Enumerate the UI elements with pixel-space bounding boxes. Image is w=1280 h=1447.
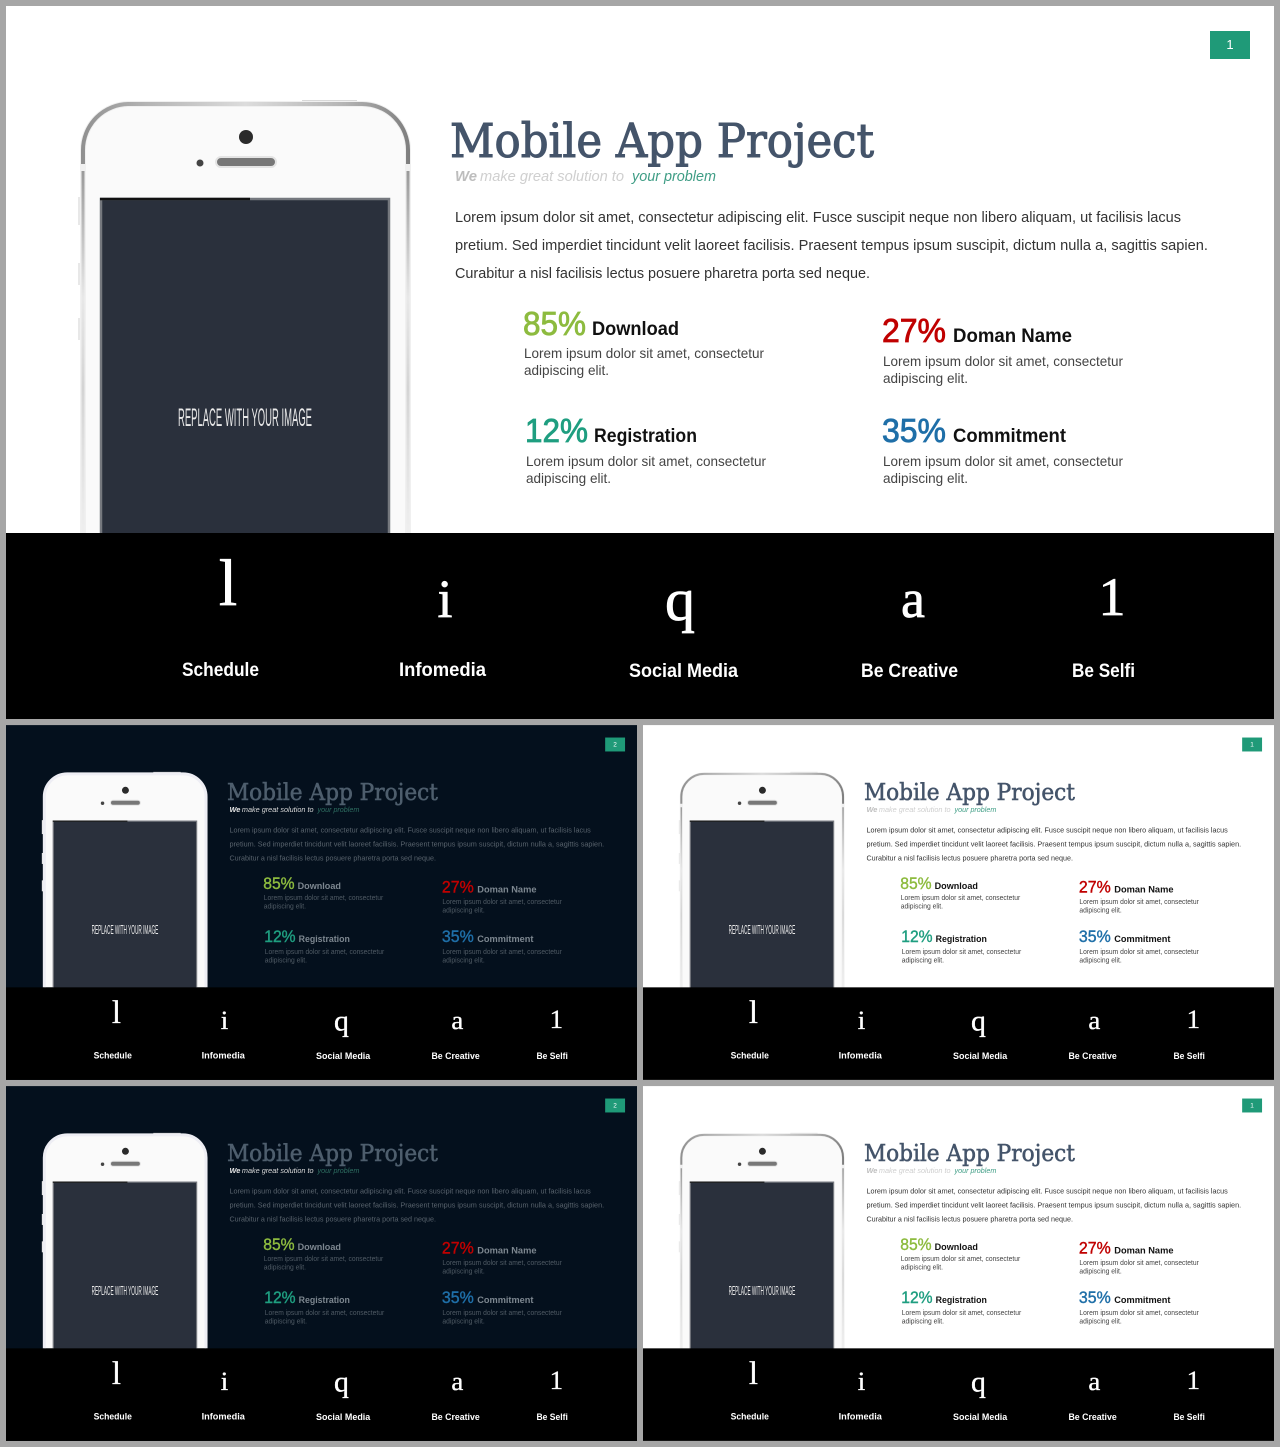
stat: registration: Lorem ipsum dolor sit amet, consectetur <box>902 949 1022 956</box>
bottom navigation band: l <box>749 995 758 1031</box>
bottom navigation band: i <box>858 1366 865 1396</box>
stat: download: 85% <box>263 1236 295 1254</box>
stat: registration: Registration <box>936 1295 987 1306</box>
phone mockup: REPLACE WITH YOUR IMAGE <box>92 1284 158 1298</box>
stat: commitment: 35% <box>882 412 946 449</box>
bottom navigation band: a <box>1088 1366 1100 1396</box>
stat: domain name: Doman Name <box>477 884 536 895</box>
page number badge: 1 <box>1226 37 1234 52</box>
title: Mobile App Project <box>450 114 874 169</box>
stat: download: Lorem ipsum dolor sit amet, consectetur <box>264 895 384 902</box>
stat: commitment: 35% <box>1079 928 1111 946</box>
intro paragraph: Lorem ipsum dolor sit amet, consectetur adipiscing elit. Fusce suscipit neque non libero aliquam, ut facilisis lacus <box>229 1187 591 1196</box>
stat: registration: Lorem ipsum dolor sit amet, consectetur <box>902 1310 1022 1317</box>
stat: domain name: Lorem ipsum dolor sit amet, consectetur <box>442 899 563 906</box>
bottom navigation band: Be Selfi <box>1173 1412 1205 1423</box>
stat: download: adipiscing elit. <box>264 904 306 911</box>
stat: commitment: Lorem ipsum dolor sit amet, consectetur <box>883 453 1123 469</box>
bottom navigation band: a <box>451 1366 463 1396</box>
subtitle <box>229 805 359 814</box>
bottom navigation band: Infomedia <box>839 1412 883 1423</box>
stat: commitment: adipiscing elit. <box>883 470 968 486</box>
stat: registration: Registration <box>299 934 350 945</box>
intro paragraph: Curabitur a nisl facilisis lectus posuere pharetra porta sed neque. <box>229 1214 436 1223</box>
stat: commitment: adipiscing elit. <box>442 957 485 964</box>
stat: registration: 12% <box>264 928 296 946</box>
bottom navigation band: Be Creative <box>1068 1412 1117 1423</box>
stat: commitment: Commitment <box>1114 1295 1171 1306</box>
stat: registration: 12% <box>901 1289 933 1307</box>
page number badge: 1 <box>1250 1102 1254 1109</box>
subtitle: We <box>229 1166 240 1175</box>
phone mockup <box>42 772 206 990</box>
stat: commitment: Lorem ipsum dolor sit amet, consectetur <box>1079 1310 1200 1317</box>
intro paragraph: Curabitur a nisl facilisis lectus posuere pharetra porta sed neque. <box>866 853 1073 862</box>
panel: light slide thumbnail top right <box>643 725 1274 1080</box>
stat: registration: 12% <box>901 928 933 946</box>
page number badge: 1 <box>1250 741 1254 748</box>
bottom navigation band: a <box>1088 1005 1100 1035</box>
page number badge <box>605 738 625 751</box>
bottom navigation band <box>643 1348 1274 1441</box>
phone mockup <box>679 772 843 990</box>
bottom navigation band: q <box>334 1366 349 1399</box>
bottom navigation band: Be Selfi <box>536 1051 568 1062</box>
stat: registration <box>264 928 385 964</box>
stat: domain name: Lorem ipsum dolor sit amet, consectetur <box>1079 1260 1200 1267</box>
intro paragraph: Curabitur a nisl facilisis lectus posuere pharetra porta sed neque. <box>229 853 436 862</box>
stat: commitment: Lorem ipsum dolor sit amet, consectetur <box>1079 949 1200 956</box>
page number badge <box>1242 1099 1262 1112</box>
stat: download: Download <box>935 881 978 892</box>
bottom navigation band: q <box>334 1005 349 1038</box>
bottom navigation band: Schedule <box>182 660 259 681</box>
stat: download: adipiscing elit. <box>264 1265 306 1272</box>
stat: registration: adipiscing elit. <box>526 470 611 486</box>
stat: download: Download <box>935 1242 978 1253</box>
intro paragraph <box>866 826 1241 862</box>
bottom navigation band: l <box>112 1356 121 1392</box>
phone mockup <box>78 100 408 539</box>
stat: domain name: 27% <box>1079 878 1111 896</box>
stat: domain name: Doman Name <box>953 326 1072 347</box>
title: Mobile App Project <box>864 1139 1076 1167</box>
panel: light slide thumbnail bottom right <box>643 1086 1274 1441</box>
stat: domain name: adipiscing elit. <box>883 370 968 386</box>
phone mockup: REPLACE WITH YOUR IMAGE <box>729 1284 795 1298</box>
page number badge <box>1242 738 1262 751</box>
subtitle: your problem <box>954 805 996 814</box>
stat: domain name: Lorem ipsum dolor sit amet, consectetur <box>1079 899 1200 906</box>
bottom navigation band: 1 <box>1187 1004 1200 1034</box>
stat: domain name: Lorem ipsum dolor sit amet, consectetur <box>883 353 1123 369</box>
bottom navigation band: i <box>221 1366 228 1396</box>
page number badge: 2 <box>613 741 617 748</box>
stat: commitment <box>442 1289 563 1325</box>
panel: main light slide <box>6 6 1274 719</box>
stat: download: Lorem ipsum dolor sit amet, consectetur <box>524 345 764 361</box>
stat: domain name: Doman Name <box>1114 884 1173 895</box>
stat: download: Lorem ipsum dolor sit amet, consectetur <box>901 1256 1021 1263</box>
bottom navigation band: Infomedia <box>839 1051 883 1062</box>
title: Mobile App Project <box>227 1139 439 1167</box>
bottom navigation band: 1 <box>550 1004 563 1034</box>
subtitle <box>866 1166 996 1175</box>
subtitle: We <box>866 1166 877 1175</box>
stat: download <box>263 875 384 911</box>
page number badge: 2 <box>613 1102 617 1109</box>
stat: download: Download <box>298 1242 341 1253</box>
stat: registration: Registration <box>594 426 697 447</box>
bottom navigation band: Social Media <box>316 1412 371 1423</box>
bottom navigation band: Schedule <box>731 1051 769 1062</box>
intro paragraph: Curabitur a nisl facilisis lectus posuere pharetra porta sed neque. <box>866 1214 1073 1223</box>
stat: commitment: Commitment <box>953 426 1067 447</box>
phone mockup: REPLACE WITH YOUR IMAGE <box>178 404 312 432</box>
stat: domain name: Doman Name <box>477 1245 536 1256</box>
stat: domain name: Lorem ipsum dolor sit amet, consectetur <box>442 1260 563 1267</box>
bottom navigation band: q <box>971 1005 986 1038</box>
stat: registration: adipiscing elit. <box>265 957 307 964</box>
stat: domain name: 27% <box>442 878 474 896</box>
subtitle: make great solution to <box>242 805 314 814</box>
subtitle: your problem <box>317 1166 359 1175</box>
bottom navigation band: 1 <box>1187 1365 1200 1395</box>
bottom navigation band: Infomedia <box>202 1051 246 1062</box>
bottom navigation band: i <box>437 569 453 629</box>
bottom navigation band <box>6 1348 637 1441</box>
intro paragraph: pretium. Sed imperdiet tincidunt velit laoreet facilisis. Praesent tempus ipsum suscipit, dictum nulla a, sagittis sapien. <box>229 840 604 849</box>
subtitle: your problem <box>631 168 716 185</box>
stat: domain name <box>1079 1239 1200 1276</box>
stat: domain name <box>442 1239 563 1276</box>
bottom navigation band <box>6 987 637 1080</box>
stat: domain name: Doman Name <box>1114 1245 1173 1256</box>
phone mockup <box>42 1133 206 1351</box>
bottom navigation band: i <box>858 1005 865 1035</box>
panel: dark slide thumbnail bottom left <box>6 1086 637 1441</box>
stat: download: adipiscing elit. <box>524 362 609 378</box>
stat: registration <box>525 412 766 486</box>
intro paragraph: pretium. Sed imperdiet tincidunt velit laoreet facilisis. Praesent tempus ipsum suscipit, dictum nulla a, sagittis sapien. <box>229 1201 604 1210</box>
bottom navigation band: 1 <box>1098 567 1126 627</box>
stat: registration: Lorem ipsum dolor sit amet, consectetur <box>265 949 385 956</box>
intro paragraph: pretium. Sed imperdiet tincidunt velit laoreet facilisis. Praesent tempus ipsum suscipit, dictum nulla a, sagittis sapien. <box>866 1201 1241 1210</box>
stat: download: adipiscing elit. <box>901 904 943 911</box>
stat: commitment: Lorem ipsum dolor sit amet, consectetur <box>442 1310 563 1317</box>
stat: download: 85% <box>523 305 586 342</box>
stat: domain name: 27% <box>1079 1239 1111 1257</box>
subtitle: make great solution to <box>879 805 951 814</box>
stat: commitment: 35% <box>442 1289 474 1307</box>
bottom navigation band <box>643 987 1274 1080</box>
intro paragraph <box>229 1187 604 1223</box>
stat: registration <box>901 1289 1022 1325</box>
stat: registration: Registration <box>299 1295 350 1306</box>
subtitle: make great solution to <box>480 168 624 185</box>
page number badge <box>1210 31 1250 59</box>
stat: registration: Registration <box>936 934 987 945</box>
bottom navigation band: Be Creative <box>1068 1051 1117 1062</box>
bottom navigation band: 1 <box>550 1365 563 1395</box>
intro paragraph: Curabitur a nisl facilisis lectus posuere pharetra porta sed neque. <box>455 265 870 282</box>
bottom navigation band: Social Media <box>316 1051 371 1062</box>
stat: download: Download <box>592 319 679 340</box>
stat: commitment: adipiscing elit. <box>1079 1318 1122 1325</box>
intro paragraph: pretium. Sed imperdiet tincidunt velit laoreet facilisis. Praesent tempus ipsum suscipit, dictum nulla a, sagittis sapien. <box>455 237 1208 254</box>
stat: registration: 12% <box>525 412 588 449</box>
stat: commitment <box>1079 928 1200 964</box>
bottom navigation band: Be Selfi <box>536 1412 568 1423</box>
stat: commitment <box>882 412 1123 486</box>
stat: domain name <box>442 878 563 915</box>
stat: download: adipiscing elit. <box>901 1265 943 1272</box>
bottom navigation band: q <box>971 1366 986 1399</box>
bottom navigation band: a <box>901 569 925 629</box>
stat: download: 85% <box>900 1236 932 1254</box>
stat: commitment: Commitment <box>1114 934 1171 945</box>
bottom navigation band: Social Media <box>629 661 738 682</box>
subtitle: We <box>866 805 877 814</box>
intro paragraph: Lorem ipsum dolor sit amet, consectetur adipiscing elit. Fusce suscipit neque non libero aliquam, ut facilisis lacus <box>455 209 1181 226</box>
stat: commitment: 35% <box>442 928 474 946</box>
stat: commitment: Lorem ipsum dolor sit amet, consectetur <box>442 949 563 956</box>
bottom navigation band: Social Media <box>953 1051 1008 1062</box>
stat: registration: adipiscing elit. <box>902 957 944 964</box>
page number badge <box>605 1099 625 1112</box>
bottom navigation band: a <box>451 1005 463 1035</box>
bottom navigation band: Infomedia <box>202 1412 246 1423</box>
stat: commitment <box>442 928 563 964</box>
bottom navigation band: Be Selfi <box>1072 661 1135 682</box>
subtitle: your problem <box>954 1166 996 1175</box>
bottom navigation band: Social Media <box>953 1412 1008 1423</box>
intro paragraph <box>229 826 604 862</box>
bottom navigation band: l <box>749 1356 758 1392</box>
subtitle <box>455 168 716 185</box>
subtitle: We <box>455 168 477 185</box>
stat: registration <box>264 1289 385 1325</box>
stat: commitment: Commitment <box>477 934 534 945</box>
phone mockup: REPLACE WITH YOUR IMAGE <box>729 923 795 937</box>
stat: domain name: 27% <box>882 312 946 349</box>
subtitle: your problem <box>317 805 359 814</box>
stat: download <box>263 1236 384 1272</box>
stat: commitment <box>1079 1289 1200 1325</box>
subtitle: make great solution to <box>879 1166 951 1175</box>
bottom navigation band: l <box>219 547 237 620</box>
stat: commitment: 35% <box>1079 1289 1111 1307</box>
bottom navigation band: Infomedia <box>399 660 486 681</box>
stat: registration <box>901 928 1022 964</box>
phone mockup: REPLACE WITH YOUR IMAGE <box>92 923 158 937</box>
stat: domain name: adipiscing elit. <box>1079 1269 1122 1276</box>
bottom navigation band: Be Creative <box>861 661 958 682</box>
bottom navigation band: Schedule <box>94 1412 132 1423</box>
stat: download: 85% <box>900 875 932 893</box>
intro paragraph: Lorem ipsum dolor sit amet, consectetur adipiscing elit. Fusce suscipit neque non libero aliquam, ut facilisis lacus <box>866 1187 1228 1196</box>
stat: domain name <box>882 312 1123 386</box>
stat: domain name: adipiscing elit. <box>1079 908 1122 915</box>
intro paragraph <box>866 1187 1241 1223</box>
phone mockup <box>679 1133 843 1351</box>
stat: registration: Lorem ipsum dolor sit amet, consectetur <box>265 1310 385 1317</box>
stat: download: Lorem ipsum dolor sit amet, consectetur <box>901 895 1021 902</box>
intro paragraph <box>455 209 1208 282</box>
subtitle <box>866 805 996 814</box>
bottom navigation band: Schedule <box>731 1412 769 1423</box>
stat: domain name: adipiscing elit. <box>442 908 485 915</box>
bottom navigation band: Be Creative <box>431 1412 480 1423</box>
stat: download <box>900 875 1021 911</box>
subtitle <box>229 1166 359 1175</box>
stat: commitment: adipiscing elit. <box>442 1318 485 1325</box>
intro paragraph: Lorem ipsum dolor sit amet, consectetur adipiscing elit. Fusce suscipit neque non libero aliquam, ut facilisis lacus <box>866 826 1228 835</box>
title: Mobile App Project <box>227 778 439 806</box>
stat: registration: 12% <box>264 1289 296 1307</box>
stat: domain name: 27% <box>442 1239 474 1257</box>
stat: domain name <box>1079 878 1200 915</box>
panel: dark slide thumbnail top left <box>6 725 637 1080</box>
subtitle: make great solution to <box>242 1166 314 1175</box>
stat: download: Download <box>298 881 341 892</box>
bottom navigation band: Schedule <box>94 1051 132 1062</box>
stat: commitment: Commitment <box>477 1295 534 1306</box>
stat: download: Lorem ipsum dolor sit amet, consectetur <box>264 1256 384 1263</box>
stat: download <box>900 1236 1021 1272</box>
bottom navigation band: q <box>665 567 695 633</box>
stat: registration: adipiscing elit. <box>265 1318 307 1325</box>
stat: domain name: adipiscing elit. <box>442 1269 485 1276</box>
stat: registration: adipiscing elit. <box>902 1318 944 1325</box>
title: Mobile App Project <box>864 778 1076 806</box>
intro paragraph: pretium. Sed imperdiet tincidunt velit laoreet facilisis. Praesent tempus ipsum suscipit, dictum nulla a, sagittis sapien. <box>866 840 1241 849</box>
subtitle: We <box>229 805 240 814</box>
intro paragraph: Lorem ipsum dolor sit amet, consectetur adipiscing elit. Fusce suscipit neque non libero aliquam, ut facilisis lacus <box>229 826 591 835</box>
bottom navigation band: i <box>221 1005 228 1035</box>
stat: commitment: adipiscing elit. <box>1079 957 1122 964</box>
bottom navigation band: Be Creative <box>431 1051 480 1062</box>
stat: download: 85% <box>263 875 295 893</box>
stat: download <box>523 305 764 378</box>
bottom navigation band <box>6 533 1274 719</box>
bottom navigation band: l <box>112 995 121 1031</box>
bottom navigation band: Be Selfi <box>1173 1051 1205 1062</box>
stat: registration: Lorem ipsum dolor sit amet, consectetur <box>526 453 766 469</box>
